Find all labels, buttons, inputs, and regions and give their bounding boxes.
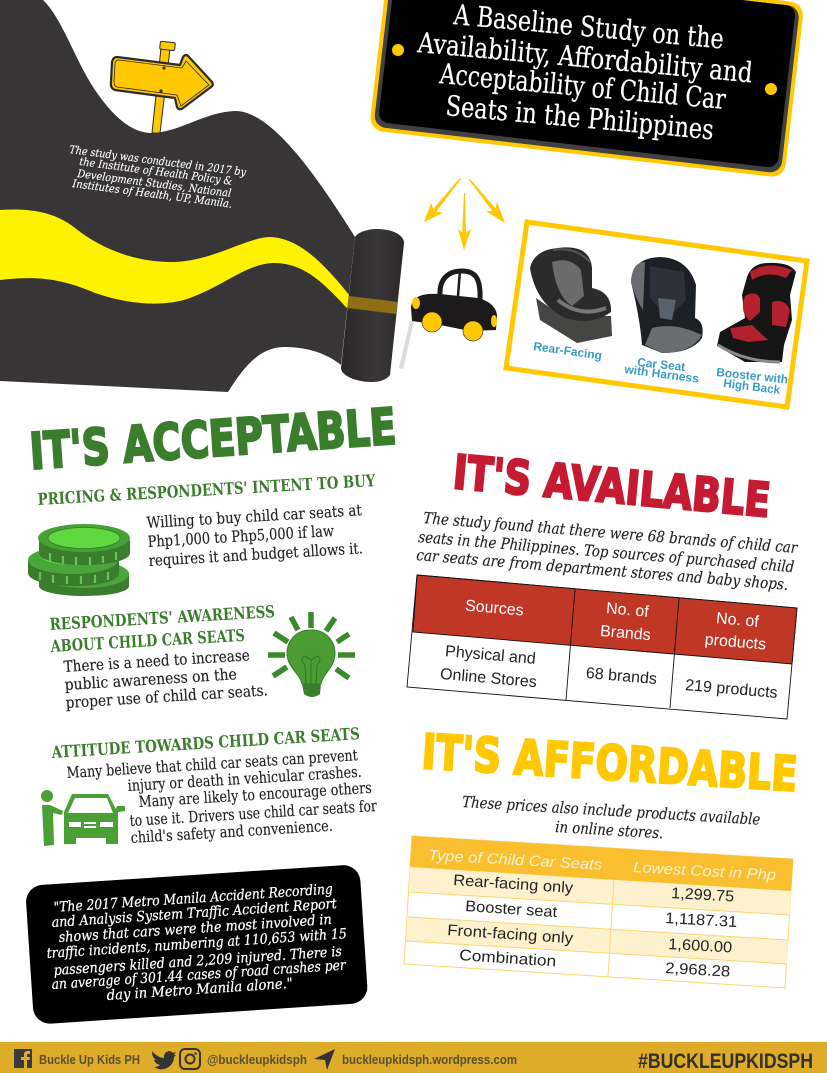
table: prices: 1,600.00: [668, 936, 733, 957]
panel: it's available: [407, 445, 799, 719]
panel: it's acceptable: [28, 398, 398, 847]
pricing text: requires it and budget allows it.: [148, 539, 363, 570]
attitude text: [66, 746, 378, 847]
panel: car seat types: [506, 222, 807, 407]
footer bar: [0, 1042, 827, 1073]
study note: The study was conducted in 2017 by: [69, 143, 247, 179]
attitude text: injury or death in vehicular crashes.: [127, 763, 362, 795]
table: sources: No. of: [605, 600, 650, 621]
image: car seat with harness: [631, 257, 703, 353]
icon: instagram: [180, 1049, 200, 1069]
table: sources: products: [704, 631, 767, 654]
roller: [341, 229, 404, 382]
study note: Institutes of Health, UP, Manila.: [71, 177, 233, 211]
image: rear-facing seat: [530, 247, 612, 343]
pricing text: [146, 501, 363, 570]
note: These prices also include products available: [462, 793, 761, 829]
handle: instagram: @buckleupkidsph: [207, 1053, 307, 1067]
panel: it's affordable: [404, 724, 799, 988]
attitude text: to use it. Drivers use child car seats for: [129, 797, 378, 830]
callout: accident report: [25, 864, 368, 1025]
table: prices: Rear-facing only: [453, 872, 574, 897]
table: prices: [404, 836, 793, 988]
note: in online stores.: [555, 818, 664, 842]
study note: the Institute of Health Policy &: [79, 155, 233, 188]
table: sources: 68 brands: [585, 665, 658, 688]
title: Seats in the Philippines: [444, 89, 715, 146]
table: prices: 1,299.75: [671, 885, 735, 906]
awareness text: [63, 646, 268, 712]
table: sources: Physical and: [444, 643, 536, 668]
awareness text: public awareness on the: [64, 665, 237, 694]
labels: [533, 339, 789, 397]
callout: accident report: traffic incidents, numbering at 110,653 with 15: [46, 926, 347, 962]
callout: accident report: an average of 301.44 cases of road crashes per: [51, 957, 347, 993]
icon: small car: [399, 270, 497, 369]
icon: navigation arrow: [314, 1049, 335, 1070]
icon: light bulb: [268, 612, 355, 697]
pricing text: Willing to buy child car seats at: [146, 501, 363, 532]
awareness text: proper use of child car seats.: [65, 681, 268, 712]
icon: coins: [28, 524, 130, 596]
awareness subheading: [49, 602, 275, 656]
handle: facebook: Buckle Up Kids PH: [39, 1053, 140, 1067]
icon: direction sign: [111, 41, 213, 133]
study note: [69, 143, 247, 211]
table: prices: Type of Child Car Seats: [428, 847, 603, 874]
attitude text: Many believe that child car seats can prevent: [66, 746, 359, 782]
table: sources: Brands: [599, 623, 651, 644]
labels: Rear-Facing: [533, 339, 603, 363]
pricing text: Php1,000 to Php5,000 if law: [147, 522, 335, 551]
arrows from title: [424, 178, 505, 250]
image: booster with high back: [717, 263, 796, 362]
heading: IT'S ACCEPTABLE: [28, 398, 398, 481]
callout: accident report: day in Metro Manila alone.": [106, 976, 293, 1004]
attitude subheading: ATTITUDE TOWARDS CHILD CAR SEATS: [50, 724, 360, 762]
title: A Baseline Study on the: [452, 0, 725, 56]
table: prices: 2,968.28: [665, 960, 731, 981]
table: sources: Online Stores: [439, 666, 537, 691]
road banner illustration: [0, 0, 404, 392]
table: sources: [407, 575, 797, 719]
title: Acceptability of Child Car: [438, 57, 728, 116]
title: [416, 0, 754, 146]
icon: facebook: [14, 1049, 32, 1068]
road centre line: [0, 210, 350, 309]
pricing subheading: PRICING & RESPONDENTS' INTENT TO BUY: [37, 471, 376, 509]
table: prices: Lowest Cost in Php: [633, 859, 777, 884]
attitude text: child's safety and convenience.: [130, 817, 333, 847]
table: prices: 1,1187.31: [665, 910, 738, 931]
callout: accident report: shows that cars were the most involved in: [58, 912, 332, 946]
labels: with Harness: [623, 362, 700, 386]
awareness subheading: RESPONDENTS' AWARENESS: [49, 602, 275, 634]
awareness text: There is a need to increase: [63, 646, 250, 676]
table: sources: No. of: [715, 610, 760, 631]
table: sources: 219 products: [685, 677, 778, 702]
icon: person with car: [41, 790, 125, 846]
title: Availability, Affordability and: [416, 26, 754, 89]
table: sources: Sources: [464, 598, 524, 619]
callout: accident report: "The 2017 Metro Manila Accident Recording: [53, 881, 333, 916]
paragraph: [416, 509, 799, 594]
awareness subheading: ABOUT CHILD CAR SEATS: [49, 626, 245, 656]
table: prices: Front-facing only: [447, 922, 574, 947]
labels: High Back: [723, 376, 781, 397]
website: buckleupkidsph.wordpress.com: [342, 1053, 517, 1067]
labels: Car Seat: [637, 355, 686, 374]
callout: accident report: passengers killed and 2,209 injured. There is: [53, 944, 342, 979]
table: prices: Combination: [459, 947, 557, 970]
title panel: [369, 0, 804, 178]
icon: twitter: [152, 1051, 176, 1069]
road: [0, 0, 355, 392]
attitude text: Many are likely to encourage others: [138, 779, 372, 811]
table: prices: Booster seat: [465, 898, 558, 921]
callout: accident report: and Analysis System Traffic Accident Report: [51, 896, 338, 931]
labels: Booster with: [716, 365, 789, 387]
note: [462, 793, 761, 842]
study note: Development Studies, National: [76, 167, 232, 200]
